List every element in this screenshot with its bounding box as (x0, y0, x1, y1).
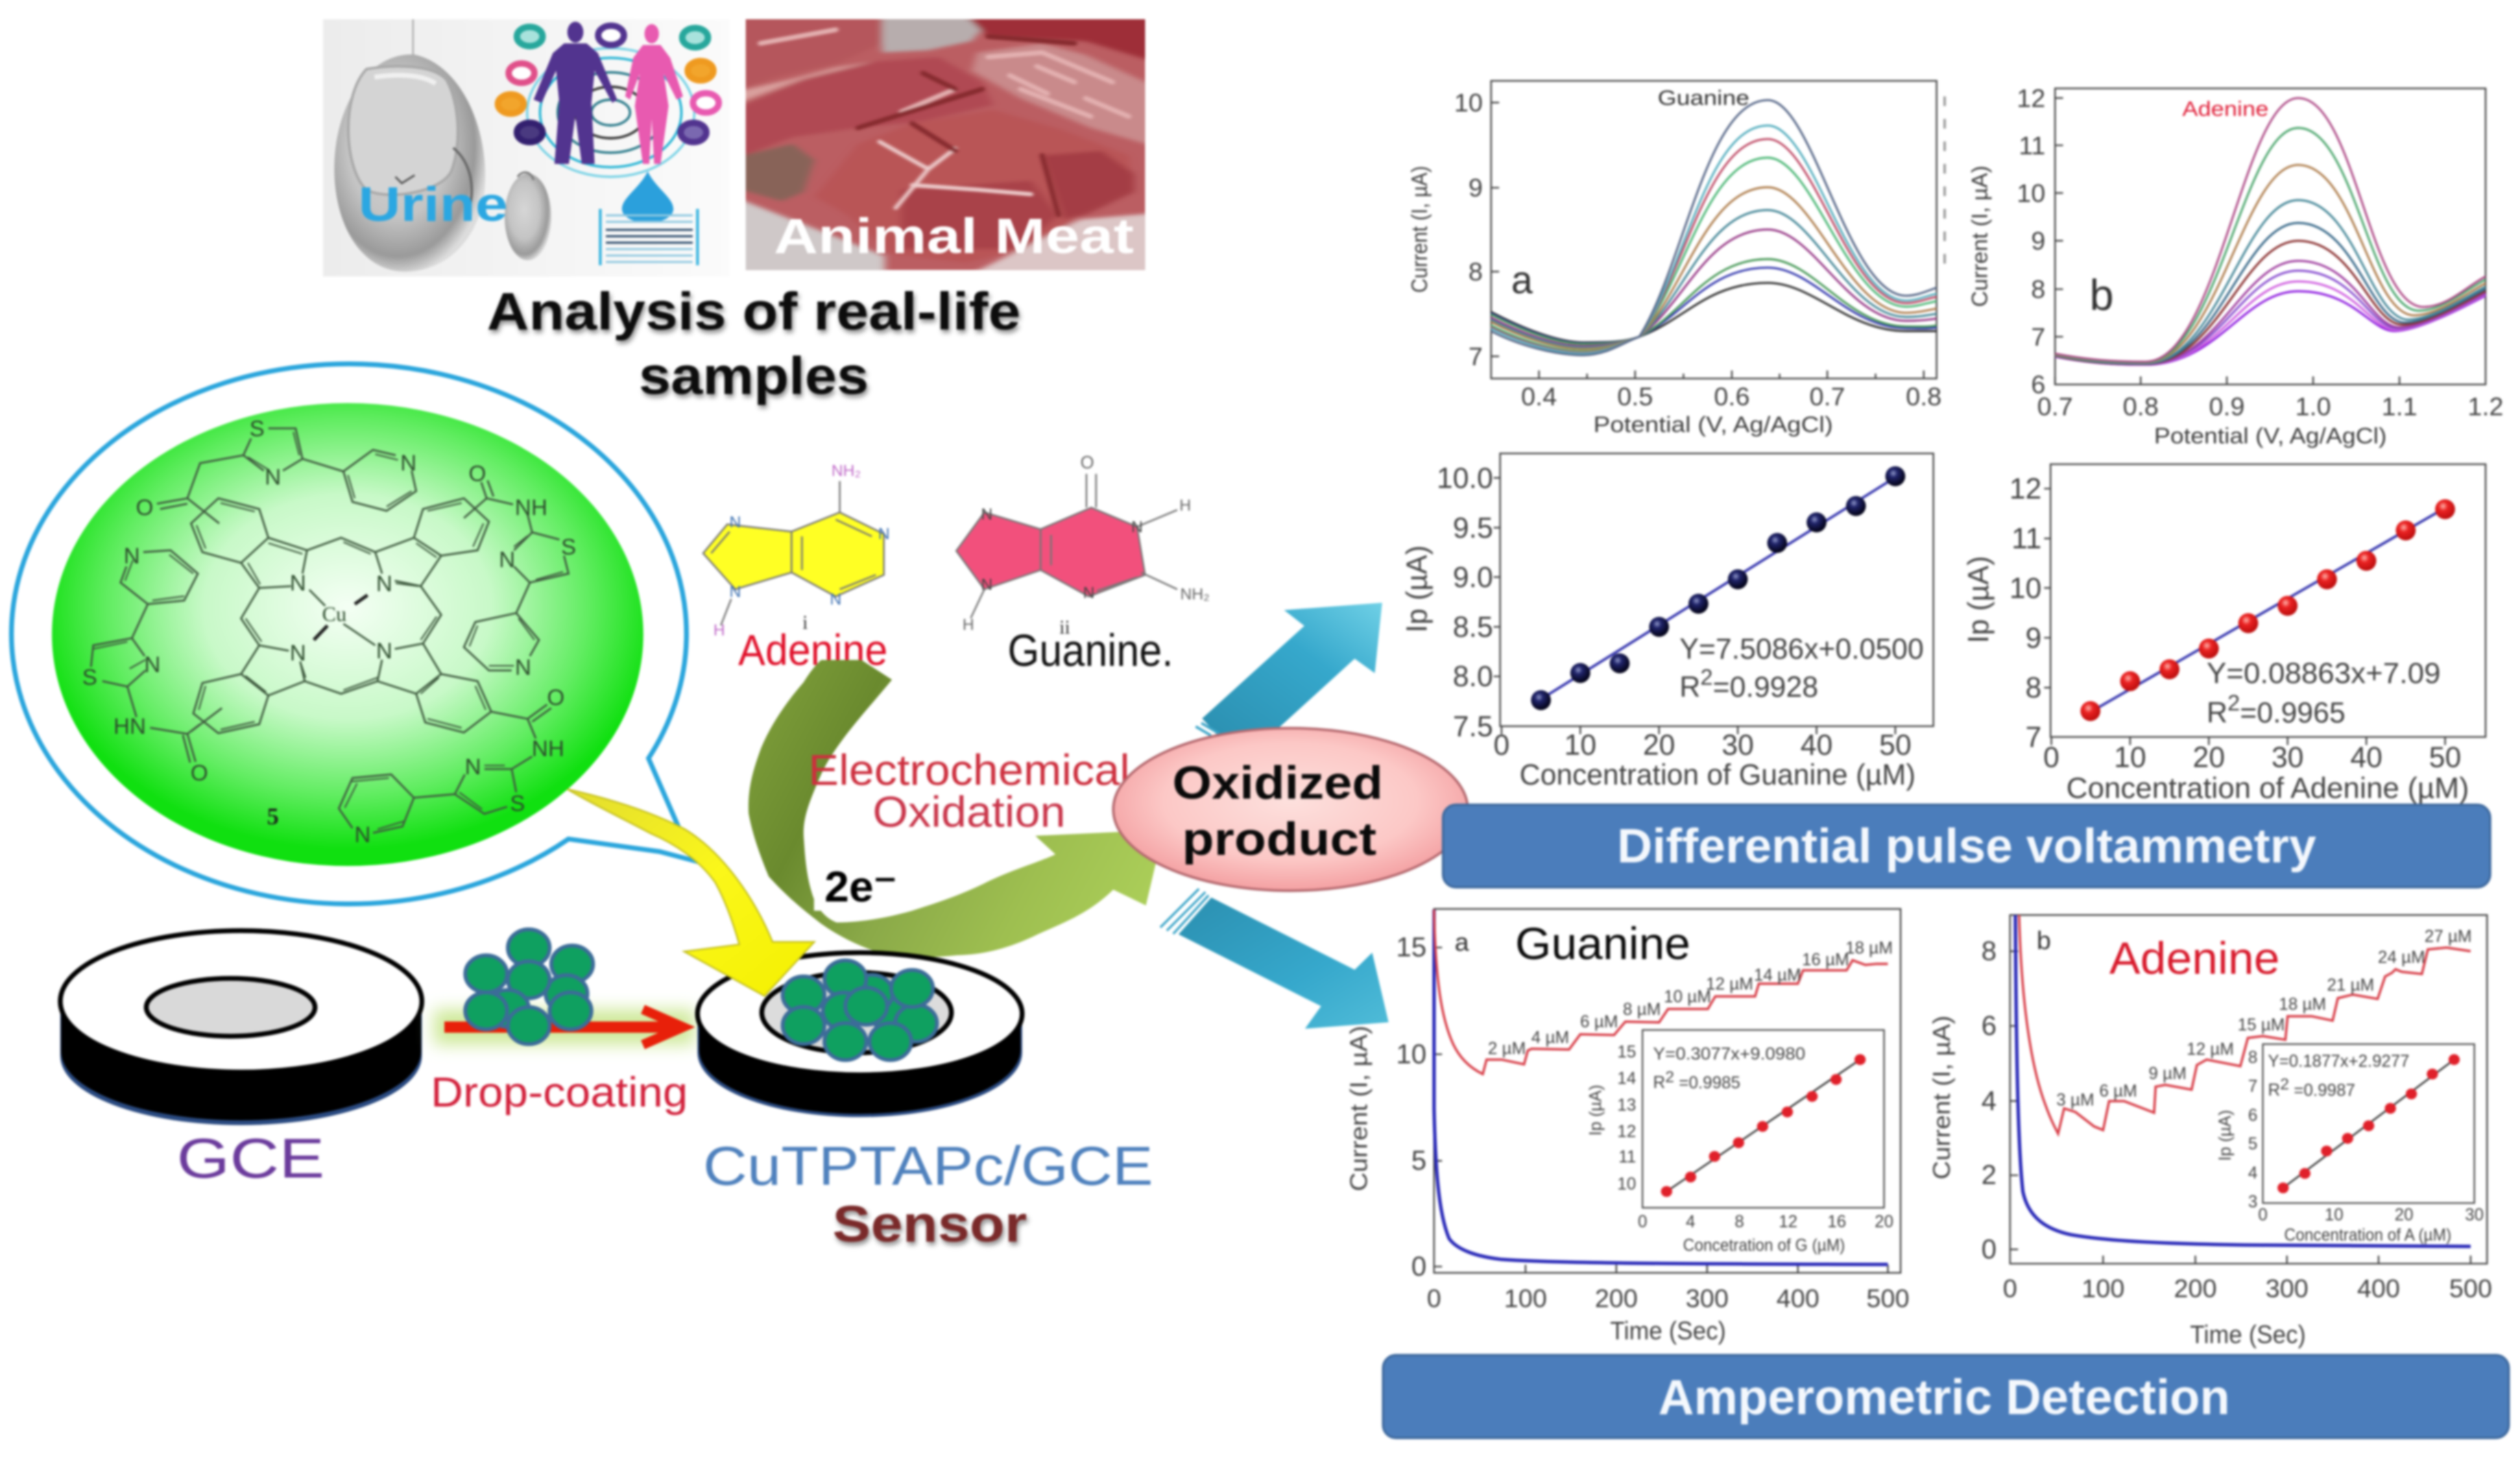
step labels: 9 µM (2148, 1065, 2187, 1084)
data points (2080, 499, 2455, 721)
chart: Ip versus guanine concentration: Y=7.5086x+0.0500 (1679, 632, 1923, 665)
banner: differential pulse voltammetry (1443, 805, 2490, 887)
chart: DPV adenine: 10 (2017, 178, 2045, 207)
chart: Ip versus adenine concentration: 8 (2026, 671, 2041, 704)
chart: Ip versus adenine concentration (1963, 464, 2486, 804)
banner: amperometric detection: Amperometric Detection (1659, 1370, 2230, 1425)
molecule: guanine: ii (1059, 617, 1070, 638)
molecule atom labels: 5 (267, 803, 279, 830)
step labels: 18 µM (1845, 939, 1893, 957)
inset calibration: 4 (1686, 1213, 1695, 1232)
molecule atom labels: N (355, 822, 371, 847)
chart: amperometric adenine: b (2037, 926, 2051, 955)
chart: DPV adenine: Current (I, µA) (1967, 165, 1992, 307)
panel: green sphere with CuTPTAPc molecule (52, 403, 643, 866)
inset calibration: 16 (1827, 1213, 1846, 1232)
inset calibration: 12 (1779, 1213, 1797, 1232)
oxidized product ellipse (1114, 728, 1468, 891)
inset calibration: Ip (µA) (2216, 1110, 2235, 1161)
fit line (1541, 477, 1895, 700)
chart: DPV adenine: 7 (2031, 322, 2045, 351)
inset calibration: 6 (2248, 1106, 2257, 1125)
icon: filter lines (600, 209, 697, 265)
icon: sensor electrode (697, 953, 1022, 1117)
molecule atom labels: N (400, 450, 416, 475)
icon: bare GCE electrode (60, 931, 422, 1125)
step labels: 18 µM (2279, 995, 2326, 1014)
chart: DPV guanine: a (1511, 258, 1533, 301)
step labels: 15 µM (2237, 1016, 2285, 1035)
oxidized product ellipse: Oxidized (1173, 756, 1383, 809)
chart: amperometric adenine: 4 (1981, 1086, 1997, 1116)
inset calibration: Y=0.1877x+2.9277 (2268, 1052, 2410, 1071)
label: electrochemical oxidation: Oxidation (873, 789, 1066, 837)
step labels: 3 µM (2056, 1091, 2094, 1110)
chart: DPV adenine: 6 (2031, 370, 2045, 399)
chart: DPV adenine: 11 (2019, 131, 2045, 160)
molecule: adenine: H (713, 621, 725, 639)
molecule: guanine: NH₂ (1180, 585, 1210, 603)
chart: Ip versus guanine concentration: 9.0 (1453, 561, 1493, 593)
molecule atom labels: N (465, 754, 481, 779)
label: Adenine: Adenine (738, 626, 887, 674)
inset calibration: 2 (1666, 1068, 1675, 1086)
title: Analysis of real-life (487, 283, 1020, 342)
chart: Ip versus guanine concentration: 9.5 (1453, 512, 1493, 544)
chart: amperometric adenine: 200 (2174, 1274, 2217, 1303)
icon: body system circles (498, 25, 719, 142)
inset calibration: Concetration of G (µM) (1683, 1236, 1845, 1255)
arrow: to differential pulse voltammetry (1196, 603, 1382, 736)
chart: DPV adenine: 0.9 (2209, 392, 2245, 420)
chart: Ip versus guanine concentration: 0 (1493, 728, 1509, 761)
label: Sensor: Sensor (832, 1195, 1027, 1252)
molecule atom labels: N (123, 543, 140, 569)
callout: molecule speech bubble (12, 364, 697, 904)
chart: DPV adenine: 0.8 (2123, 392, 2159, 420)
arrow: to amperometric detection (1160, 889, 1389, 1029)
chart: amperometric adenine: 0 (1981, 1234, 1997, 1265)
chart: DPV adenine: 1.0 (2295, 392, 2331, 420)
icon: concentric rings (527, 48, 695, 177)
chart: amperometric guanine: a (1454, 927, 1469, 956)
label: 2e-: 2e⁻ (824, 863, 897, 911)
voltammogram curves (2055, 98, 2486, 365)
step labels: 8 µM (1623, 1001, 1661, 1019)
step labels: 27 µM (2425, 927, 2472, 946)
chart: amperometric guanine: Time (Sec) (1610, 1316, 1726, 1345)
banner: differential pulse voltammetry: Differential pulse voltammetry (1617, 818, 2316, 872)
chart: amperometric guanine: 300 (1685, 1284, 1729, 1313)
chart: amperometric adenine: 400 (2357, 1274, 2400, 1303)
inset calibration: 20 (1875, 1213, 1893, 1232)
molecule: guanine: N (1083, 584, 1094, 601)
chart: DPV adenine: 8 (2031, 275, 2045, 304)
step labels: 16 µM (1802, 951, 1849, 970)
chart: amperometric adenine: 500 (2449, 1274, 2492, 1303)
molecule: guanine: N (981, 575, 993, 593)
chart: amperometric guanine: 5 (1411, 1146, 1426, 1176)
inset calibration: =0.9985 (1675, 1074, 1740, 1092)
chart: Ip versus guanine concentration: 2 (1701, 664, 1713, 689)
inset calibration: 5 (2248, 1135, 2257, 1154)
molecule: guanine (957, 453, 1210, 676)
step labels: 6 µM (1580, 1013, 1618, 1031)
inset calibration: R (1653, 1074, 1666, 1092)
chart: DPV adenine: 1.1 (2381, 392, 2417, 420)
molecule atom labels: N (265, 464, 281, 490)
red step current (1434, 909, 1888, 1074)
chart: Ip versus guanine concentration: 20 (1643, 728, 1675, 761)
icon: large urinal (335, 54, 485, 272)
photo: animal meat panel (733, 16, 1162, 276)
molecule: guanine: N (1131, 518, 1143, 536)
chart: Ip versus adenine concentration: 2 (2227, 690, 2240, 715)
icon: water drop (622, 171, 673, 223)
step labels: 10 µM (1664, 988, 1711, 1006)
chart: Ip versus adenine concentration: 20 (2193, 741, 2225, 773)
step labels: 12 µM (1706, 975, 1753, 994)
chart: DPV guanine: 0.4 (1521, 382, 1557, 411)
chart: amperometric adenine: 0 (2003, 1274, 2017, 1303)
inset calibration: 2 (2280, 1075, 2289, 1092)
icon: small urinal (505, 172, 551, 261)
molecule: guanine: H (963, 616, 974, 634)
chart: DPV adenine: 0.7 (2037, 392, 2073, 420)
inset calibration: =0.9987 (2289, 1081, 2355, 1099)
inset calibration: Y=0.3077x+9.0980 (1653, 1045, 1805, 1064)
chart: DPV adenine: Adenine (2182, 97, 2268, 121)
inset calibration: Concentration of A (µM) (2284, 1226, 2451, 1245)
chart: Ip versus adenine concentration: =0.9965 (2240, 696, 2345, 728)
molecule atom labels: NH (515, 494, 547, 520)
molecule: adenine: N (730, 582, 741, 600)
inset calibration: 8 (2248, 1049, 2257, 1067)
molecule: adenine: i (802, 612, 808, 634)
chart: amperometric guanine: 10 (1396, 1039, 1426, 1069)
arrow: molecule to electrode (567, 789, 815, 996)
chart: DPV guanine: 9 (1468, 174, 1483, 202)
chart: amperometric adenine: 6 (1981, 1011, 1997, 1041)
banner: amperometric detection (1383, 1355, 2509, 1438)
molecule: adenine: N (830, 590, 841, 608)
chart: DPV guanine (1406, 81, 1945, 437)
chart: DPV adenine: 1.2 (2468, 392, 2504, 420)
step labels: 24 µM (2378, 948, 2425, 967)
inset calibration: 0 (1637, 1213, 1647, 1232)
chart: Ip versus guanine concentration: 10 (1564, 728, 1596, 761)
step labels (1488, 939, 1893, 1058)
chart: Ip versus guanine concentration: 7.5 (1453, 710, 1493, 742)
chart: Ip versus adenine concentration: 30 (2272, 741, 2304, 773)
chart: Ip versus guanine concentration: R (1679, 670, 1701, 702)
inset calibration (1587, 1030, 1893, 1255)
chart: Ip versus guanine concentration: 8.5 (1453, 611, 1493, 643)
chart: amperometric guanine: 200 (1595, 1284, 1637, 1313)
step labels (2056, 927, 2472, 1110)
chart: DPV guanine: 10 (1454, 88, 1483, 117)
inset calibration: 10 (2325, 1206, 2343, 1224)
chart: Ip versus adenine concentration: 10 (2114, 741, 2146, 773)
label: GCE: GCE (177, 1127, 324, 1190)
molecule atom labels: N (144, 652, 160, 677)
molecule atom labels: N (515, 654, 531, 680)
molecule skeleton (91, 429, 568, 833)
chart: DPV adenine: 12 (2017, 84, 2045, 112)
inset calibration: 11 (1618, 1148, 1636, 1167)
chart: Ip versus guanine concentration: 40 (1801, 728, 1833, 761)
chart: Ip versus adenine concentration: 50 (2429, 741, 2461, 773)
chart: Ip versus adenine concentration: Y=0.08863x+7.09 (2207, 657, 2440, 689)
chart: DPV guanine: Guanine (1658, 86, 1749, 110)
molecule atom labels: NH (532, 736, 564, 761)
chart: DPV guanine: 8 (1468, 257, 1483, 286)
chart: Ip versus guanine concentration: 30 (1722, 728, 1754, 761)
chart: Ip versus guanine concentration (1401, 453, 1934, 791)
step labels: 14 µM (1754, 966, 1801, 985)
inset calibration: 15 (1618, 1043, 1636, 1062)
molecule: adenine: N (878, 525, 890, 542)
icon: male body (533, 22, 617, 164)
step labels: 2 µM (1488, 1040, 1526, 1058)
molecule atom labels: O (547, 684, 564, 710)
molecule: guanine: H (1179, 497, 1191, 514)
molecule atom labels: S (250, 416, 265, 441)
inset calibration: 7 (2248, 1077, 2257, 1096)
oxidized product ellipse: product (1182, 813, 1376, 865)
chart: amperometric guanine: 100 (1504, 1284, 1547, 1313)
inset calibration: 3 (2248, 1193, 2257, 1212)
inset calibration (2216, 1044, 2484, 1245)
step labels: 6 µM (2099, 1082, 2137, 1101)
chart: Ip versus adenine concentration: 11 (2011, 523, 2041, 555)
chart: amperometric guanine: 0 (1427, 1284, 1441, 1313)
molecule atom labels: O (468, 460, 486, 486)
molecule: adenine: N (730, 513, 741, 531)
title (487, 283, 1020, 405)
molecule atom labels (82, 416, 576, 847)
chart: Ip versus adenine concentration: 12 (2009, 473, 2041, 505)
molecule atom labels: O (136, 494, 154, 520)
chart: DPV guanine: 0.8 (1906, 382, 1942, 411)
step labels: 4 µM (1531, 1029, 1569, 1047)
chart: Ip versus guanine concentration: 10.0 (1437, 462, 1493, 494)
chart: amperometric adenine: Adenine (2109, 933, 2280, 983)
chart: Ip versus adenine concentration: R (2207, 696, 2227, 728)
chart: amperometric guanine: 400 (1777, 1284, 1819, 1313)
inset calibration: 12 (1618, 1123, 1636, 1141)
molecule atom labels: S (561, 534, 576, 560)
icon: sensor droplets (782, 960, 937, 1060)
icon: CuTPTAPc droplet cluster (466, 929, 593, 1044)
chart: Ip versus adenine concentration: 10 (2009, 572, 2041, 604)
molecule atom labels: Cu (322, 603, 346, 626)
label: electrochemical oxidation (808, 747, 1130, 837)
chart: Ip versus adenine concentration: Concentration of Adenine (µM) (2066, 772, 2469, 804)
blue background current (1434, 909, 1888, 1265)
chart: amperometric adenine: Time (Sec) (2190, 1319, 2306, 1348)
inset calibration: 10 (1618, 1175, 1636, 1193)
chart: Ip versus guanine concentration: 50 (1880, 728, 1911, 761)
label: electrochemical oxidation: Electrochemical (808, 747, 1130, 795)
step labels: 21 µM (2327, 976, 2374, 994)
chart: amperometric guanine: Current (I, µA) (1345, 1026, 1372, 1191)
chart: DPV adenine: Potential (V, Ag/AgCl) (2154, 423, 2387, 449)
arrow: drop-coating (434, 1009, 695, 1044)
chart: Ip versus guanine concentration: Ip (µA) (1401, 545, 1433, 632)
chart: DPV adenine: 9 (2031, 226, 2045, 255)
chart: Ip versus adenine concentration: Ip (µA) (1963, 556, 1995, 643)
molecule: guanine: N (981, 505, 993, 523)
chart: amperometric guanine: 500 (1867, 1284, 1909, 1313)
chart: amperometric guanine: 15 (1396, 933, 1426, 963)
chart: DPV guanine: 7 (1468, 342, 1483, 371)
arrow: electrochemical oxidation (748, 660, 1160, 957)
chart: Ip versus guanine concentration: Concentration of Guanine (µM) (1520, 758, 1916, 791)
data points (1531, 466, 1906, 710)
molecule: adenine (703, 462, 890, 674)
chart: DPV guanine: 0.7 (1810, 382, 1845, 411)
chart: Ip versus guanine concentration: =0.9928 (1713, 670, 1819, 702)
chart: DPV guanine: 0.5 (1617, 382, 1653, 411)
molecule atom labels: N (376, 638, 392, 663)
molecule: adenine: NH₂ (832, 462, 861, 479)
title: samples (639, 346, 869, 405)
molecule atom labels: S (510, 791, 525, 816)
chart: DPV guanine: Current (I, µA) (1406, 166, 1432, 293)
chart: amperometric adenine: 100 (2082, 1274, 2124, 1303)
chart: Ip versus adenine concentration: 7 (2026, 721, 2041, 753)
inset calibration: 30 (2465, 1206, 2484, 1224)
red step current (2019, 915, 2471, 1134)
voltammogram curves (1491, 100, 1936, 355)
inset calibration: 0 (2258, 1206, 2268, 1224)
inset calibration: Ip (µA) (1587, 1085, 1605, 1136)
molecule: guanine: O (1081, 453, 1094, 473)
molecule atom labels: N (376, 571, 392, 596)
inset calibration: R (2268, 1081, 2280, 1099)
inset calibration: 20 (2395, 1206, 2413, 1224)
label: Guanine: Guanine. (1008, 625, 1173, 676)
chart: Ip versus adenine concentration: 0 (2043, 741, 2059, 773)
molecule atom labels: S (82, 664, 97, 689)
chart: DPV guanine: 0.6 (1714, 382, 1750, 411)
chart: amperometric guanine (1345, 909, 1909, 1345)
chart: Ip versus adenine concentration: 9 (2026, 621, 2041, 654)
chart: amperometric adenine: 2 (1981, 1160, 1997, 1191)
chart: DPV adenine (1967, 84, 2504, 449)
molecule atom labels: O (191, 760, 208, 785)
inset calibration: 13 (1618, 1097, 1636, 1115)
chart: Ip versus adenine concentration: 40 (2350, 741, 2382, 773)
chart: amperometric guanine: Guanine (1515, 918, 1690, 968)
inset calibration: 14 (1618, 1069, 1636, 1088)
inset calibration: 8 (1735, 1213, 1744, 1232)
chart: amperometric adenine: 8 (1981, 936, 1997, 966)
inset calibration: 4 (2248, 1164, 2257, 1182)
label: CuTPTAPc/GCE: CuTPTAPc/GCE (703, 1136, 1153, 1197)
molecule atom labels: HN (113, 713, 146, 739)
step labels: 12 µM (2187, 1040, 2234, 1059)
icon: female body (625, 24, 683, 164)
label: Animal Meat: Animal Meat (774, 208, 1134, 264)
molecule atom labels: N (290, 640, 306, 665)
label: drop-coating: Drop-coating (431, 1069, 688, 1116)
chart: amperometric adenine (1928, 915, 2492, 1348)
molecule atom labels: N (499, 547, 515, 572)
chart: DPV guanine: Potential (V, Ag/AgCl) (1594, 411, 1833, 437)
chart: Ip versus guanine concentration: 8.0 (1453, 660, 1493, 693)
chart: amperometric adenine: 300 (2266, 1274, 2308, 1303)
fit line (2091, 508, 2445, 712)
chart: amperometric adenine: Current (I, µA) (1928, 1016, 1955, 1180)
photo: urine panel (323, 19, 730, 276)
blue background current (2015, 915, 2471, 1246)
chart: amperometric guanine: 0 (1411, 1252, 1426, 1282)
chart: DPV adenine: b (2089, 272, 2114, 320)
molecule atom labels: N (290, 570, 306, 595)
label: Urine: Urine (359, 177, 508, 231)
